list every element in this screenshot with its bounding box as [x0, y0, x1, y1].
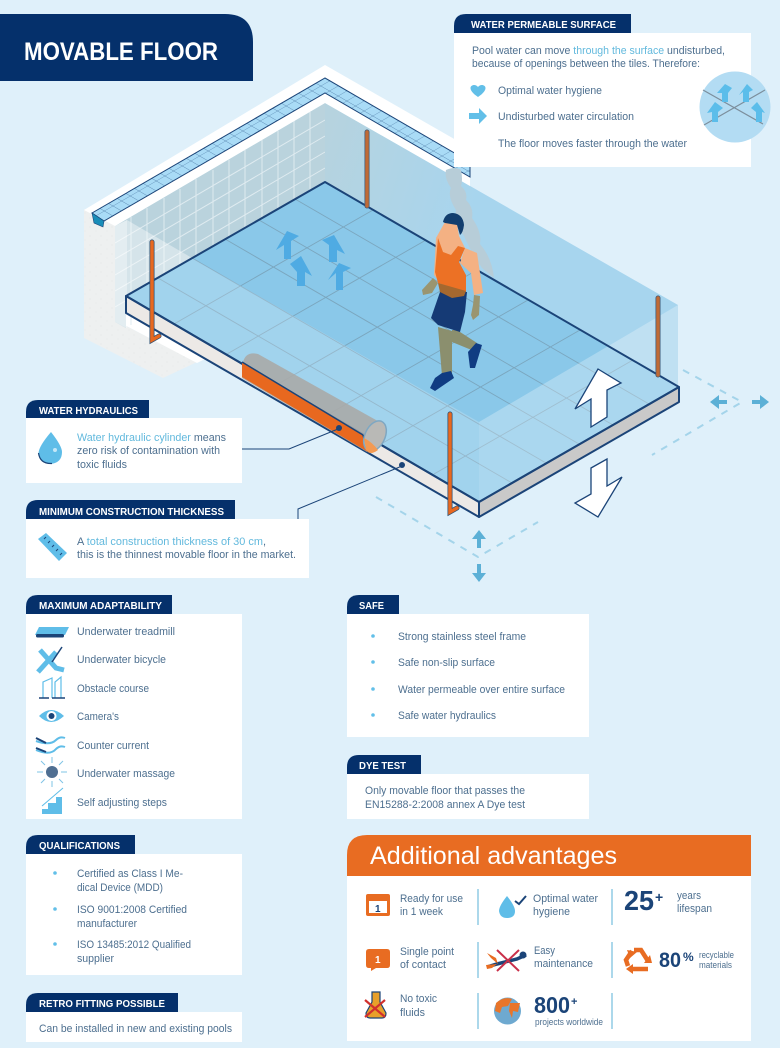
- panel: water permeable surface: because of openings between the tiles. Therefore:: [472, 58, 700, 70]
- guide post front: [450, 414, 457, 512]
- panel: minimum construction thickness: A total construction thickness of 30 cm,: [77, 536, 266, 548]
- icon: flow arrow: [469, 108, 487, 124]
- panel: retro fitting: [26, 993, 242, 1042]
- panel: dye test: Only movable floor that passes the: [365, 785, 525, 797]
- panel: water hydraulics: Water hydraulic cylinder means: [77, 432, 226, 444]
- panel: qualifications: Certified as Class I Me-: [77, 868, 183, 880]
- stat: 80% recyclable: %: [683, 950, 694, 964]
- white pool coping: [84, 65, 470, 226]
- panel: minimum construction thickness: MINIMUM CONSTRUCTION THICKNESS: [39, 506, 224, 518]
- icon: speech bubble: 1: [375, 955, 381, 966]
- translucent water volume faces: [126, 258, 479, 502]
- stat: 25+ years lifespan: years: [677, 890, 701, 902]
- panel: qualifications: [26, 835, 242, 975]
- guide post back-left: [152, 242, 159, 340]
- expansion arrow right: [752, 395, 769, 409]
- panel: additional advantages: Ready for use: [400, 893, 463, 905]
- panel: additional advantages: fluids: [400, 1007, 425, 1019]
- floor slab left edge: [126, 296, 479, 517]
- panel: safe: SAFE: [359, 600, 384, 612]
- movable floor top surface: [126, 182, 679, 502]
- panel: additional advantages: in 1 week: [400, 906, 443, 918]
- panel: minimum construction thickness: [26, 500, 309, 578]
- icon: recycle: [626, 950, 652, 974]
- icon: bicycle: [38, 647, 64, 672]
- icon: obstacle course: [39, 677, 65, 698]
- stat: 80% recyclable: 80: [659, 949, 681, 972]
- floor slab right edge: [479, 387, 679, 517]
- panel: dye test: DYE TEST: [359, 760, 407, 772]
- panel: additional advantages: Additional advantages: [370, 842, 617, 870]
- upward water flow arrows: [276, 231, 351, 290]
- icon: heart: [470, 85, 486, 97]
- stat: 25+ years lifespan: +: [655, 889, 663, 905]
- icon: speech bubble: [366, 949, 390, 971]
- concrete pool shell: [84, 209, 197, 378]
- panel: water hydraulics: [26, 400, 242, 483]
- panel: additional advantages: Optimal water: [533, 893, 598, 905]
- panel: water permeable surface: WATER PERMEABLE SURFACE: [471, 19, 616, 31]
- tiled back-left wall: [115, 103, 325, 328]
- icon: ruler: [38, 533, 67, 561]
- panel: maximum adaptability: [26, 595, 242, 819]
- title banner: MOVABLE FLOOR: [24, 38, 218, 66]
- panel: additional advantages: of contact: [400, 959, 446, 971]
- panel: qualifications: supplier: [77, 953, 114, 965]
- panel: qualifications: ISO 9001:2008 Certified: [77, 904, 187, 916]
- panel: water hydraulics: toxic fluids: [77, 459, 127, 471]
- icon: calendar: [366, 894, 390, 916]
- panel: additional advantages: [347, 835, 751, 1041]
- panel: safe: Safe water hydraulics: [398, 710, 496, 722]
- icon: treadmill: [35, 627, 69, 638]
- panel: qualifications: manufacturer: [77, 918, 137, 930]
- panel: safe: Strong stainless steel frame: [398, 631, 526, 643]
- panel: additional advantages: hygiene: [533, 906, 570, 918]
- icon: camera eye: [39, 710, 64, 722]
- large down movement arrow: [575, 459, 622, 517]
- stat: 25+ years lifespan: lifespan: [677, 903, 712, 915]
- panel: water hydraulics: zero risk of contamination with: [77, 445, 220, 457]
- panel: retro fitting: RETRO FITTING POSSIBLE: [39, 998, 165, 1010]
- dashed extension lines: [376, 370, 742, 557]
- panel: safe: Safe non-slip surface: [398, 657, 495, 669]
- panel: qualifications: ISO 13485:2012 Qualified: [77, 939, 191, 951]
- panel: additional advantages: Single point: [400, 946, 454, 958]
- callout line: construction thickness: [298, 462, 405, 519]
- stat: 80% recyclable: [659, 949, 734, 972]
- icon: massage: [37, 757, 67, 787]
- panel: maximum adaptability: Underwater massage: [77, 768, 175, 780]
- white base ledge: [115, 313, 207, 363]
- stat: 25+ years lifespan: [624, 885, 712, 916]
- column dividers: [478, 889, 612, 1029]
- icon: flask crossed out: [365, 992, 386, 1018]
- callout line: water hydraulics: [242, 425, 342, 449]
- panel: water permeable surface: The floor moves faster through the water: [498, 138, 687, 150]
- guide post right: [656, 298, 660, 375]
- panel: additional advantages: No toxic: [400, 993, 437, 1005]
- overflow grate tile strip: [92, 78, 470, 227]
- panel: water hydraulics: WATER HYDRAULICS: [39, 405, 138, 417]
- panel: maximum adaptability: Underwater bicycle: [77, 654, 166, 666]
- stat: 800+ projects: [534, 992, 603, 1028]
- panel: maximum adaptability: Camera's: [77, 711, 119, 723]
- panel: maximum adaptability: Underwater treadmill: [77, 626, 175, 638]
- panel: maximum adaptability: MAXIMUM ADAPTABILITY: [39, 600, 162, 612]
- large up movement arrow: [575, 369, 621, 427]
- panel: safe: Water permeable over entire surface: [398, 684, 565, 696]
- expansion arrow down: [472, 564, 486, 582]
- panel: qualifications: QUALIFICATIONS: [39, 840, 120, 852]
- panel: dye test: EN15288-2:2008 annex A Dye test: [365, 799, 525, 811]
- stat: 80% recyclable: recyclable: [699, 950, 734, 960]
- panel: additional advantages: maintenance: [534, 958, 593, 970]
- stat: 800+ projects: projects worldwide: [535, 1017, 603, 1028]
- icon: tile gap circle with arrows: [700, 72, 770, 142]
- panel: safe: [347, 595, 589, 737]
- panel: dye test: [347, 755, 589, 819]
- panel: retro fitting: Can be installed in new and existing pools: [39, 1023, 232, 1035]
- stat: 80% recyclable: materials: [699, 960, 732, 970]
- floor top outline: [126, 182, 679, 502]
- icon: water drop: [38, 432, 62, 464]
- panel: water permeable surface: [454, 14, 770, 167]
- guide post back: [364, 132, 370, 206]
- icon: drop and check: [499, 896, 526, 918]
- expansion arrow left: [710, 395, 727, 409]
- hydraulic cylinder: [242, 353, 391, 455]
- stat: 800+ projects: +: [571, 996, 577, 1008]
- panel: maximum adaptability: Counter current: [77, 740, 149, 752]
- icon: steps: [42, 788, 63, 814]
- panel: qualifications: dical Device (MDD): [77, 882, 163, 894]
- stat: 800+ projects: 800: [534, 992, 570, 1018]
- concrete wall section behind swimmer: [446, 168, 494, 278]
- swimmer figure: [422, 213, 483, 391]
- icon: calendar: 1: [375, 904, 381, 915]
- stat: 25+ years lifespan: 25: [624, 885, 654, 916]
- panel: water permeable surface: Undisturbed water circulation: [498, 111, 634, 123]
- translucent back-right water wall: [325, 103, 678, 387]
- panel: minimum construction thickness: this is the thinnest movable floor in the market.: [77, 549, 296, 561]
- icon: counter current: [36, 737, 65, 753]
- icon: diver crossed out: [486, 950, 526, 971]
- panel: water permeable surface: Optimal water hygiene: [498, 85, 602, 97]
- expansion arrow up: [472, 530, 486, 548]
- panel: water permeable surface: Pool water can move through the surface undisturbed,: [472, 45, 725, 57]
- panel: maximum adaptability: Obstacle course: [77, 683, 149, 695]
- panel: maximum adaptability: Self adjusting steps: [77, 797, 167, 809]
- pool illustration: [84, 65, 769, 582]
- floor grid: [158, 199, 649, 483]
- icon: globe: [494, 998, 521, 1024]
- panel: additional advantages: Easy: [534, 945, 555, 957]
- title banner: [0, 14, 253, 81]
